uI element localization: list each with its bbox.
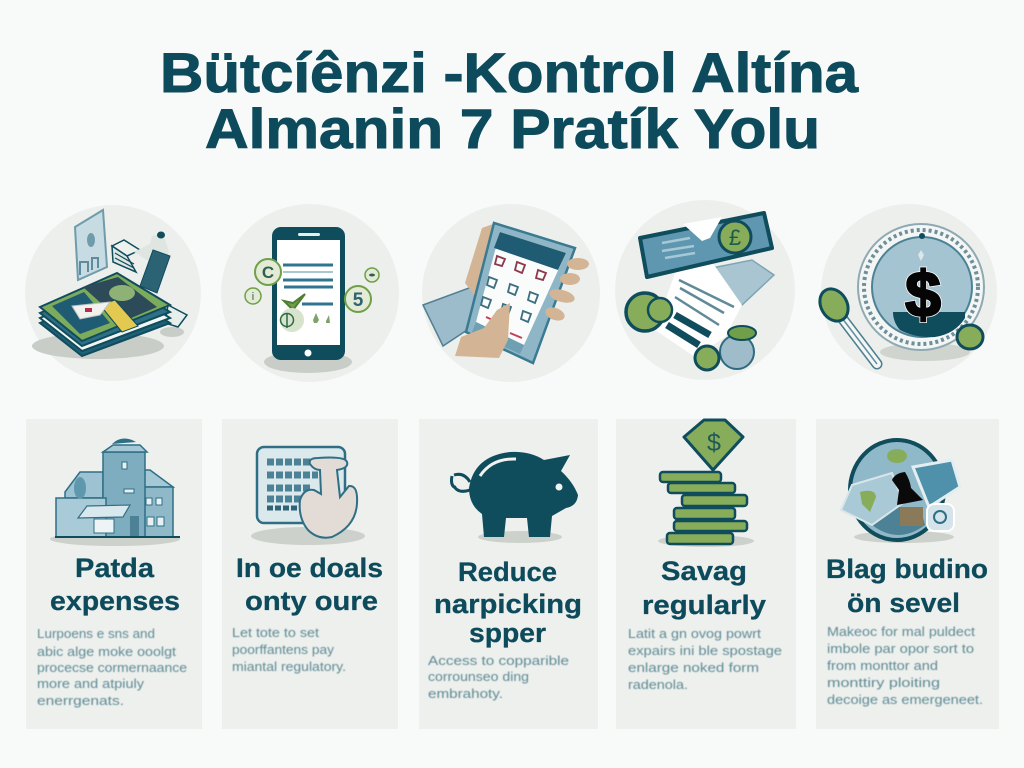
card 1 body text: Lurpoens e sns and <box>37 627 155 641</box>
panel: card 5 <box>816 419 999 729</box>
card 4 heading: Savag <box>661 556 747 586</box>
panel: card 3 <box>419 419 598 729</box>
card 5 body text: from monttor and <box>827 659 938 673</box>
card 5 heading: ön sevel <box>847 588 960 618</box>
card 4 body text: Latit a gn ovog powrt <box>628 627 762 641</box>
card 4 body text: enlarge noked form <box>628 661 759 675</box>
icon circle 1: cash stack <box>25 205 201 381</box>
icon: coin stack with diamond <box>658 420 754 547</box>
icon: piggy bank <box>452 452 578 543</box>
card 1 heading: expenses <box>50 586 180 616</box>
icon circle 2: phone: 5 <box>353 290 364 311</box>
title: Almanin 7 Pratík Yolu <box>205 97 820 160</box>
card 3 heading: spper <box>469 618 547 648</box>
icon circle 2: phone <box>221 204 399 382</box>
card 2 heading: In oe doals <box>236 553 383 583</box>
card 3 body text: corrounseo ding <box>428 670 529 684</box>
icon: buildings <box>50 438 180 546</box>
card 5 body text: imbole par opor sort to <box>827 642 974 656</box>
card 1 body text: more and atpiuly <box>37 677 145 691</box>
card 5 heading: Blag budino <box>826 554 988 584</box>
card 3 heading: Reduce <box>458 557 557 587</box>
icon circle 4: ticket, document and coins <box>615 200 795 380</box>
icon circle 2: phone: C <box>262 263 274 282</box>
panel: card 4 <box>616 419 796 729</box>
card 1 body text: enerrgenats. <box>37 694 124 708</box>
icon circle 5: dollar dial <box>814 204 997 380</box>
card 2 heading: onty oure <box>245 586 378 616</box>
icon circle 3: tablet checklist with hands <box>422 204 600 382</box>
card 5 body text: decoige as emergeneet. <box>827 693 983 707</box>
card 3 body text: Access to copparible <box>428 654 569 668</box>
card 4 body text: expairs ini ble spostage <box>628 644 782 658</box>
card 5 body text: monttiry ploiting <box>827 676 940 690</box>
icon circle 4: ticket, document and coins: £ <box>729 225 741 250</box>
title: Bütcíênzi -Kontrol Altína <box>160 41 859 104</box>
card 2 body text: miantal regulatory. <box>232 660 346 674</box>
icon circle 2: phone: i <box>252 291 254 303</box>
card 4 body text: radenola. <box>628 678 688 692</box>
title <box>160 41 859 160</box>
icon circle 5: dollar dial: $ <box>905 258 941 330</box>
card 1 heading: Patda <box>75 553 155 583</box>
panel: card 1 <box>26 419 202 729</box>
card 1 body text: procecse cormernaance <box>37 661 187 675</box>
icon: keypad with hand <box>251 447 365 545</box>
icon: coin stack with diamond: $ <box>707 429 721 457</box>
card 4 heading: regularly <box>642 590 766 620</box>
icon circle 5: dollar dial: $ <box>905 258 941 330</box>
card 3 heading: narpicking <box>434 589 582 619</box>
card 2 body text: poorffantens pay <box>232 643 335 657</box>
panel: card 2 <box>222 419 398 729</box>
card 2 body text: Let tote to set <box>232 626 320 640</box>
card 5 body text: Makeoc for mal puldect <box>827 625 976 639</box>
card 1 body text: abic alge moke ooolgt <box>37 645 177 659</box>
card 3 body text: embrahoty. <box>428 687 503 701</box>
icon: globe with banknotes <box>841 440 960 543</box>
